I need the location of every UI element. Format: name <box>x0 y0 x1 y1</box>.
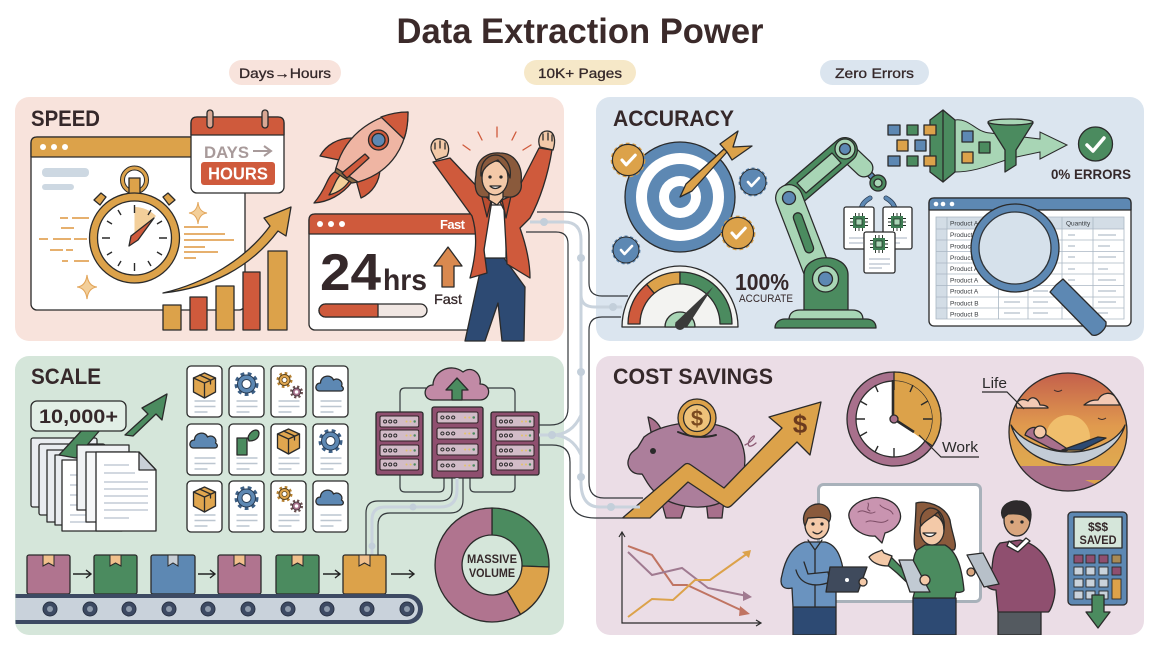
icon: magnifying glass <box>971 204 1106 335</box>
text: 0% errors: 0% ERRORS <box>1051 166 1131 182</box>
icon: piggy bank <box>628 399 756 518</box>
data table window: Quantity <box>1066 220 1091 228</box>
data table window: Product A <box>950 232 979 239</box>
donut chart: massive volume <box>435 508 549 622</box>
icon: calculator: SAVED <box>1080 535 1116 547</box>
growth arrow <box>125 394 167 436</box>
icon: calendar days to hours: DAYS <box>204 143 249 162</box>
donut chart: massive volume: VOLUME <box>469 566 515 580</box>
stats window: 24 <box>320 244 381 302</box>
heading: accuracy: ACCURACY <box>613 106 734 131</box>
pipe to boxes <box>366 478 463 555</box>
icon: calculator <box>1068 512 1127 628</box>
chip cards <box>844 207 912 273</box>
label: life: Life <box>982 376 1007 392</box>
flow arrows <box>73 570 414 578</box>
pill: 10K+ Pages <box>524 60 636 85</box>
conveyor belt <box>16 594 423 624</box>
stats window: hrs <box>383 264 427 297</box>
pill: 10K+ Pages: 10K+ Pages <box>538 65 622 81</box>
heading: scale: SCALE <box>31 364 101 389</box>
icon: clock work split <box>847 372 941 466</box>
person: man with tablet <box>781 504 867 635</box>
icon: stopwatch <box>90 168 180 283</box>
pill: Zero Errors <box>820 60 929 85</box>
donut chart: massive volume: MASSIVE <box>467 552 517 566</box>
pill: Zero Errors: Zero Errors <box>835 65 914 81</box>
badges <box>612 144 766 263</box>
icon card grid <box>187 366 348 532</box>
icon: target <box>625 131 752 252</box>
icon: sunset hammock <box>1009 373 1127 491</box>
panel: cost savings <box>596 356 1144 635</box>
data table window: Product A <box>950 278 979 284</box>
heading: cost savings: COST SAVINGS <box>613 364 773 389</box>
data table window: Product A <box>950 288 979 296</box>
stats window: Fast <box>434 291 462 307</box>
text: 100% accurate: ACCURATE <box>739 293 793 305</box>
panel: scale <box>15 356 564 635</box>
label: 10,000+: 10,000+ <box>39 407 118 428</box>
icon: rocket <box>314 112 408 203</box>
text: 100% accurate: 100% <box>735 269 789 295</box>
data table window: Product B <box>950 312 979 318</box>
growth arrow <box>163 207 291 293</box>
icon: piggy bank: $ <box>691 406 703 431</box>
panel: accuracy <box>596 97 1144 341</box>
person: celebrating woman <box>431 127 555 341</box>
browser window <box>31 137 245 310</box>
panel: speed <box>15 97 564 341</box>
sparkles <box>77 202 207 299</box>
data table window: Product A <box>950 255 979 262</box>
data table window: Product A <box>950 244 979 250</box>
heading: speed: SPEED <box>31 106 100 131</box>
icon: calendar days to hours: HOURS <box>208 164 268 184</box>
speed lines <box>39 218 234 261</box>
label: 10,000+ <box>31 401 126 431</box>
text: dollar sign: $ <box>793 409 808 439</box>
icon: filter pipeline <box>888 110 1067 182</box>
whiteboard <box>818 484 980 602</box>
bar chart <box>163 251 287 330</box>
icon: robot arm <box>775 139 895 328</box>
stats window: Fast <box>440 217 466 232</box>
server connectors <box>400 388 515 492</box>
person: woman with tablet <box>869 502 964 635</box>
pill: Days to Hours <box>229 60 341 85</box>
data table window: Product B <box>950 300 979 308</box>
pill: Days to Hours: Days→Hours <box>239 65 331 81</box>
label: work <box>919 435 979 457</box>
connector lines <box>526 212 643 518</box>
servers <box>376 407 539 478</box>
icon: cloud upload <box>425 368 489 400</box>
icon: check circle <box>1078 127 1112 161</box>
data table window: Product A <box>950 266 979 273</box>
icon: calendar days to hours <box>191 110 284 193</box>
label: life <box>982 376 1024 409</box>
data table window: Product A <box>950 220 979 228</box>
data table window: Price <box>1003 220 1018 228</box>
stats window <box>309 214 484 330</box>
gauge chart <box>622 266 738 330</box>
line chart <box>619 532 761 626</box>
icon: calculator: $$$ <box>1088 520 1108 534</box>
title: Data Extraction Power <box>396 12 764 51</box>
data table window <box>929 198 1131 326</box>
person: man in sweater <box>967 501 1055 635</box>
document stack <box>31 415 156 531</box>
icon: brain <box>849 498 901 543</box>
label: work: Work <box>942 440 979 456</box>
conveyor boxes <box>27 555 414 594</box>
growth arrow <box>622 402 821 518</box>
